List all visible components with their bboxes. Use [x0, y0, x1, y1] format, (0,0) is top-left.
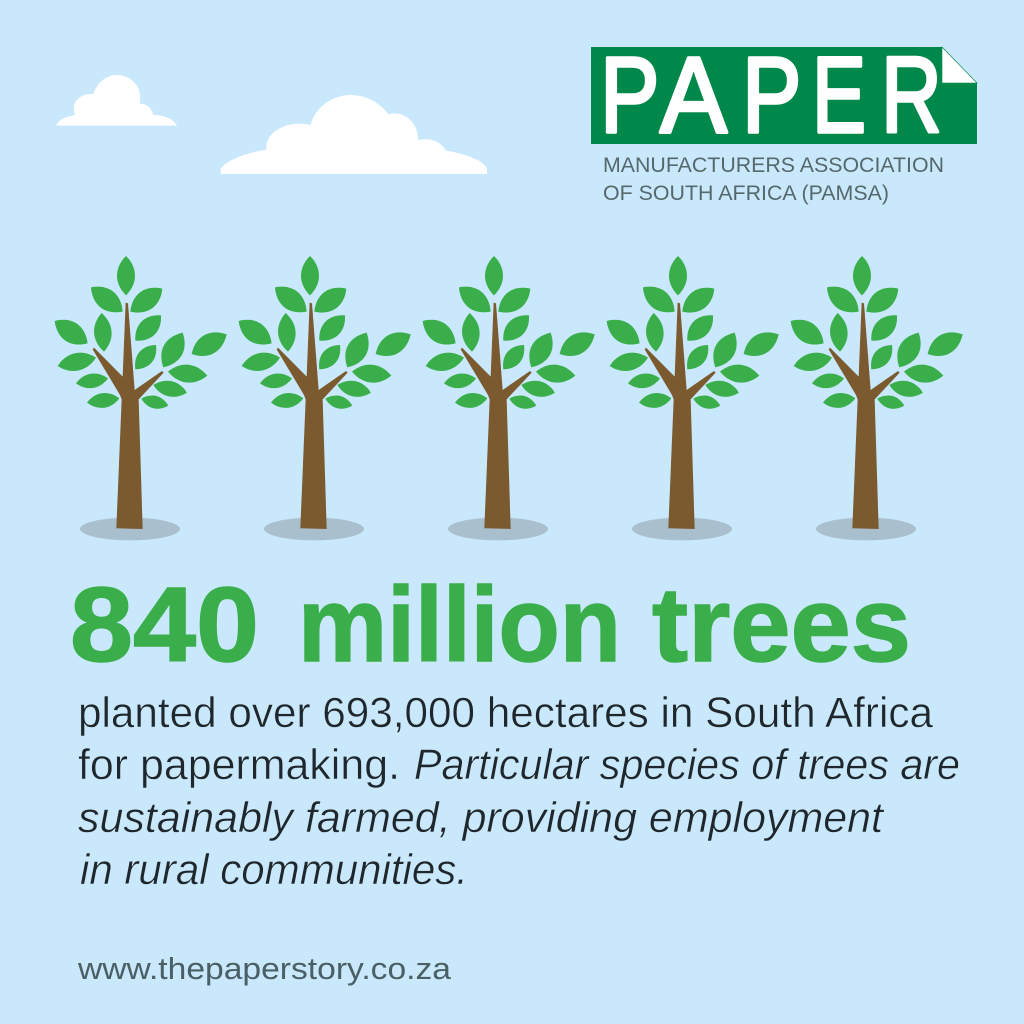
logo wordmark: P	[742, 34, 801, 155]
icon: large cloud	[221, 95, 487, 174]
headline: million	[298, 566, 621, 684]
icon: tree 3	[423, 256, 595, 540]
headline: 840	[70, 566, 259, 684]
body text	[78, 689, 960, 894]
headline: trees	[652, 566, 911, 684]
body text: Particular species of trees are	[414, 741, 960, 789]
icon: tree 5	[791, 256, 963, 540]
logo subtitle: OF SOUTH AFRICA (PAMSA)	[603, 181, 889, 205]
website url: www.thepaperstory.co.za	[77, 951, 452, 986]
logo: PAPER manufacturers association	[591, 34, 977, 205]
logo wordmark: R	[881, 34, 942, 155]
body text: sustainably farmed, providing employment	[78, 794, 885, 842]
icon: tree 1	[55, 256, 227, 540]
body text: in rural communities.	[80, 846, 468, 894]
body text: for papermaking.	[78, 741, 400, 789]
row of five trees	[55, 256, 963, 540]
logo subtitle	[603, 153, 944, 205]
logo wordmark	[600, 34, 942, 156]
body text: planted over 693,000 hectares in South Africa	[78, 689, 933, 737]
icon: tree 2	[239, 256, 411, 540]
logo wordmark: E	[812, 36, 866, 156]
logo subtitle: MANUFACTURERS ASSOCIATION	[603, 153, 944, 177]
icon: small cloud	[56, 75, 177, 126]
headline	[70, 566, 911, 684]
logo green banner with folded corner	[591, 47, 977, 144]
logo wordmark: P	[600, 34, 659, 155]
logo wordmark: A	[660, 36, 727, 156]
icon: tree 4	[607, 256, 779, 540]
